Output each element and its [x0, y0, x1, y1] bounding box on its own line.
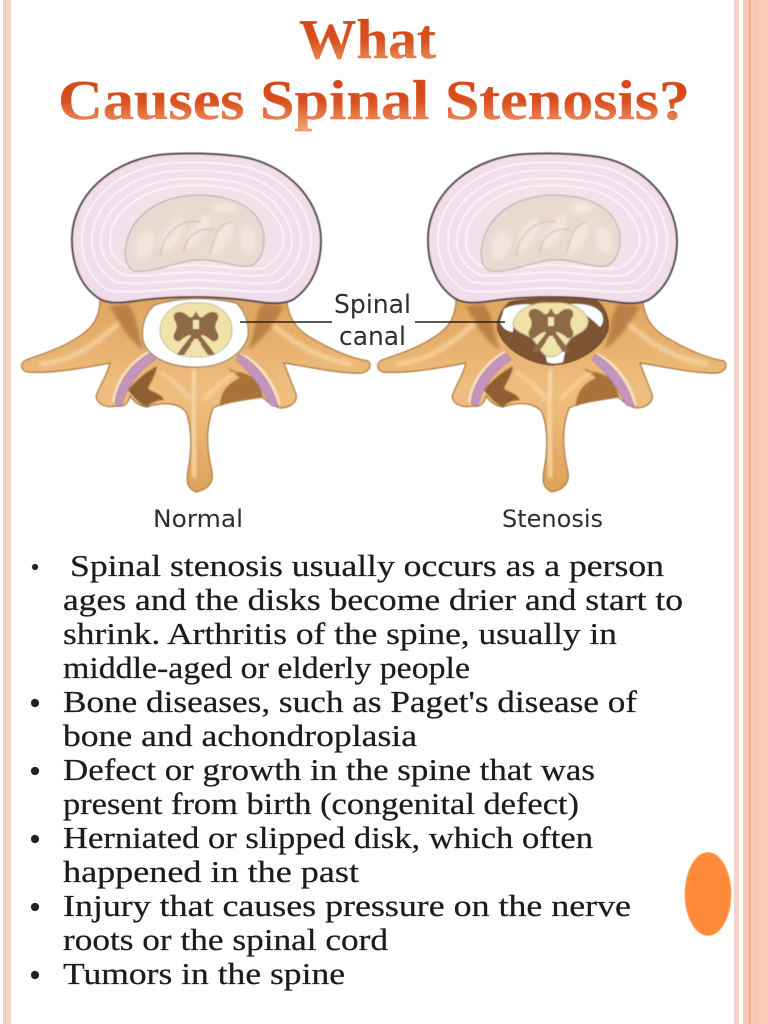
bullet item 1: Spinal stenosis usually occurs as a person: [70, 548, 665, 583]
bullet item 1: shrink. Arthritis of the spine, usually in: [63, 616, 618, 651]
bullet item 2: bone and achondroplasia: [63, 718, 417, 753]
label: spinal canal: [240, 290, 505, 352]
left border stripe: [3, 0, 11, 1024]
title: What: [299, 9, 436, 71]
bullet item 3: present from birth (congenital defect): [63, 786, 579, 821]
label: stenosis: Stenosis: [502, 505, 603, 533]
bullet item 1: middle-aged or elderly people: [63, 650, 470, 685]
bullet item 2: [31, 684, 638, 753]
bullet item 1: ages and the disks become drier and start to: [63, 582, 683, 617]
bullet item 5: Injury that causes pressure on the nerve: [63, 888, 631, 923]
orange oval: [685, 852, 731, 936]
spinal canal, normal: [143, 299, 248, 367]
bullet item 6: Tumors in the spine: [63, 956, 345, 991]
bullet item 4: happened in the past: [63, 854, 359, 889]
title: Causes Spinal Stenosis?: [58, 70, 690, 132]
diagram: stenosis vertebra: [378, 153, 726, 492]
bullet item 3: [31, 752, 595, 821]
label: normal: Normal: [153, 505, 243, 533]
bullet item 2: Bone diseases, such as Paget's disease of: [63, 684, 638, 719]
right border stripes: [734, 0, 768, 1024]
title: [58, 9, 690, 132]
bullet list of causes: [31, 548, 683, 991]
bullet item 3: Defect or growth in the spine that was: [63, 752, 595, 787]
narrowed spinal canal: [498, 298, 608, 365]
bullet item 5: roots or the spinal cord: [63, 922, 389, 957]
bullet item 1: [32, 548, 683, 685]
diagram: normal vertebra: [22, 153, 370, 492]
label: spinal canal: canal: [339, 322, 406, 352]
bullet item 4: [31, 820, 594, 889]
bullet item 5: [31, 888, 631, 957]
label: spinal canal: Spinal: [334, 290, 411, 320]
bullet item 4: Herniated or slipped disk, which often: [63, 820, 594, 855]
